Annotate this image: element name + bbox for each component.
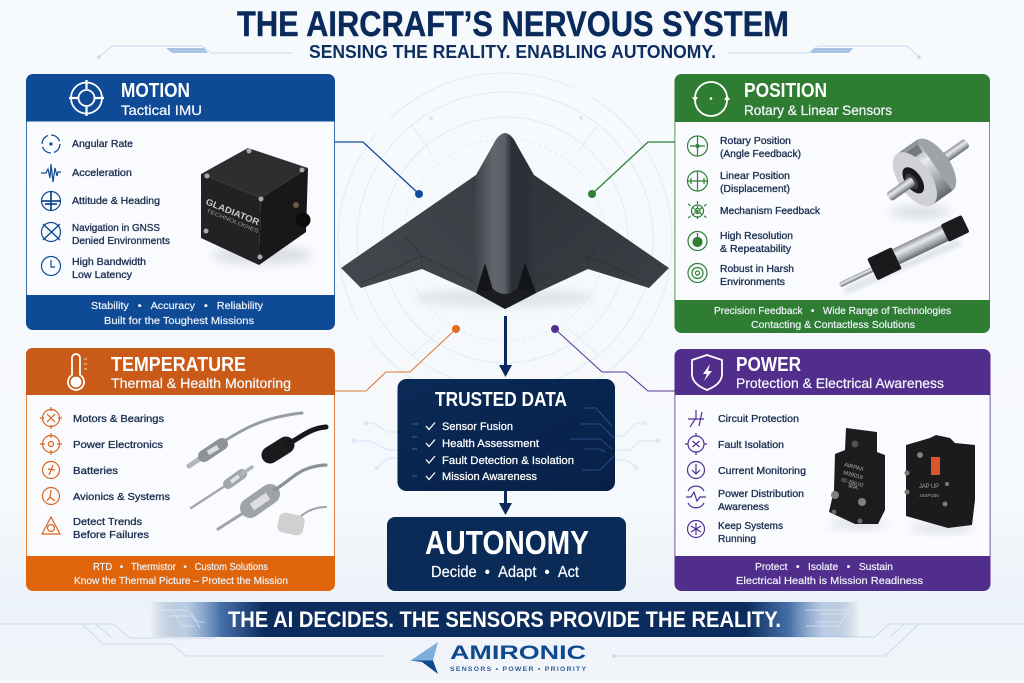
text: trends: Detect Trends: [73, 516, 142, 528]
text: linear: Linear Position: [720, 170, 790, 182]
banner text: THE AI DECIDES. THE SENSORS PROVIDE THE REALITY.: [228, 607, 781, 632]
text: keep running: [718, 520, 783, 545]
text: bandwidth: High Bandwidth: [72, 256, 146, 268]
text: angular rate: Angular Rate: [72, 138, 133, 150]
text: robust: [720, 263, 794, 288]
circuit traces inside: [412, 408, 614, 476]
bottom decorative circuit lines: [0, 624, 1024, 658]
text: decide adapt act: Decide • Adapt • Act: [431, 564, 580, 581]
position footer text: [714, 305, 951, 331]
icon: angular rate: [42, 135, 60, 153]
checklist: Sensor Fusion: [442, 421, 513, 433]
product: IMU: [201, 148, 312, 265]
position subheading: Rotary & Linear Sensors: [744, 102, 892, 118]
logo mark: [410, 642, 438, 674]
motion footer text: [91, 300, 264, 327]
panel: temperature: [26, 348, 335, 591]
text: keep running: Keep Systems: [718, 520, 783, 532]
position heading: POSITION: [744, 80, 827, 102]
text: avionics: Avionics & Systems: [73, 491, 170, 503]
text: navigation: [72, 222, 170, 247]
radar rings background: [338, 73, 672, 407]
icon: motion target: [69, 80, 104, 116]
temperature subheading: Thermal & Health Monitoring: [111, 375, 291, 391]
text: rotary: Rotary Position: [720, 135, 791, 147]
icon: acceleration: [41, 164, 61, 182]
panel: trusted data: [398, 379, 615, 491]
product: IMU: GLADIATOR: [204, 197, 261, 227]
icon: bandwidth clock: [42, 256, 60, 276]
product: IMU: TECHNOLOGIES: [205, 208, 260, 235]
product: right breaker: JAP UP: [919, 484, 939, 490]
checklist: Fault Detection & Isolation: [442, 455, 574, 467]
text: batteries: Batteries: [73, 465, 118, 477]
text: rotary: [720, 135, 801, 160]
text: attitude: Attitude & Heading: [72, 195, 160, 207]
icon: shield: [692, 355, 722, 390]
product: temperature probes: [189, 413, 326, 536]
heading: autonomy: AUTONOMY: [425, 524, 589, 561]
text: linear: (Displacement): [720, 183, 790, 195]
temperature footer text: [74, 561, 288, 587]
icon: thermometer: [68, 354, 87, 390]
temperature footer text: RTD • Thermistor • Custom Solutions: [93, 561, 268, 573]
icon: circuit protection: [688, 410, 704, 427]
power footer text: Protect • Isolate • Sustain: [755, 561, 893, 573]
subtitle: SENSING THE REALITY. ENABLING AUTONOMY.: [309, 42, 716, 62]
text: circuit protection: Circuit Protection: [718, 413, 799, 425]
text: resolution: & Repeatability: [720, 243, 792, 255]
panel: power: [674, 349, 990, 591]
text: trends: Before Failures: [73, 529, 149, 541]
text: power distribution: Power Distribution: [718, 488, 804, 500]
product: left breaker: AIRPAX: [843, 462, 864, 473]
title decorative lines: [97, 46, 921, 59]
power footer text: [736, 561, 923, 587]
power footer text: Electrical Health is Mission Readiness: [736, 575, 923, 587]
panel: autonomy: [387, 517, 626, 591]
text: resolution: [720, 230, 793, 255]
text: acceleration: Acceleration: [72, 167, 132, 179]
motion heading: MOTION: [121, 80, 190, 102]
motion subheading: Tactical IMU: [121, 102, 202, 118]
product: left breaker: 80A: [847, 483, 859, 492]
icon: keep running: [688, 520, 704, 538]
icon: rotation: [692, 82, 730, 116]
circuit traces around trusted data: [352, 422, 660, 470]
icon: resolution: [688, 232, 707, 250]
checklist: Mission Awareness: [442, 471, 538, 483]
text: current monitoring: Current Monitoring: [718, 465, 806, 477]
logo tagline: SENSORS • POWER • PRIORITY: [450, 666, 586, 673]
text: rotary: (Angle Feedback): [720, 148, 801, 160]
product: right breaker: [904, 435, 975, 532]
text: bandwidth: [72, 256, 146, 281]
arrow: aircraft to trusted data: [499, 316, 512, 377]
text: power distribution: Awareness: [718, 501, 769, 513]
text: resolution: High Resolution: [720, 230, 793, 242]
position footer text: Contacting & Contactless Solutions: [751, 319, 915, 331]
product: left breaker: 02-290-02: [840, 477, 864, 489]
text: linear: [720, 170, 790, 195]
panel: position: [674, 74, 990, 333]
connector: power: [551, 325, 675, 391]
text: keep running: Running: [718, 533, 756, 545]
text: fault isolation: Fault Isolation: [718, 439, 784, 451]
title: THE AIRCRAFT’S NERVOUS SYSTEM: [237, 5, 789, 44]
text: power distribution: [718, 488, 804, 513]
icon: attitude: [42, 192, 60, 210]
logo: Amironic: [410, 642, 586, 674]
text: motors: Motors & Bearings: [73, 413, 164, 425]
text: navigation: Navigation in GNSS: [72, 222, 160, 234]
power subheading: Protection & Electrical Awareness: [736, 375, 944, 391]
temperature heading: TEMPERATURE: [111, 354, 246, 376]
text: robust: Environments: [720, 276, 785, 288]
text: power electronics: Power Electronics: [73, 439, 163, 451]
arrow: trusted data to autonomy: [499, 491, 512, 515]
aircraft: [341, 133, 669, 309]
icon: rotary: [688, 136, 708, 156]
icon: current monitoring: [688, 462, 704, 478]
connector: position: [588, 142, 675, 198]
icon: avionics: [42, 488, 60, 504]
banner: [150, 602, 860, 637]
product: linear sensor: [835, 214, 971, 296]
icon: batteries: [42, 462, 60, 478]
power heading: POWER: [736, 354, 801, 376]
icon: navigation: [42, 222, 60, 242]
icon: power electronics: [40, 433, 62, 455]
motion footer text: Stability • Accuracy • Reliability: [91, 300, 264, 312]
product: left breaker: [829, 428, 886, 528]
panel: motion: [26, 74, 335, 330]
text: bandwidth: Low Latency: [72, 269, 133, 281]
icon: trends warning: [42, 517, 60, 534]
icon: power distribution: [686, 486, 706, 508]
text: robust: Robust in Harsh: [720, 263, 794, 275]
icon: mechanism: [688, 201, 707, 221]
text: mechanism: Mechanism Feedback: [720, 205, 821, 217]
product: rotary encoder: [871, 117, 985, 223]
temperature footer text: Know the Thermal Picture – Protect the Mission: [74, 575, 288, 587]
motion footer text: Built for the Toughest Missions: [104, 315, 254, 327]
text: trends: [73, 516, 149, 541]
heading: trusted data: TRUSTED DATA: [435, 389, 567, 411]
icon: robust: [688, 264, 707, 282]
checklist: Health Assessment: [442, 438, 539, 450]
checklist: [426, 421, 574, 483]
product: right breaker: 10SP1B0: [919, 493, 940, 498]
connector: motion: [335, 142, 423, 198]
text: navigation: Denied Environments: [72, 235, 170, 247]
icon: fault isolation: [685, 433, 707, 455]
connector: temperature: [335, 325, 460, 391]
icon: motors: [40, 407, 62, 429]
logo wordmark: AMIRONIC: [450, 642, 586, 664]
icon: linear: [688, 171, 708, 191]
product: left breaker: M39019: [842, 470, 863, 481]
position footer text: Precision Feedback • Wide Range of Technologies: [714, 305, 951, 317]
